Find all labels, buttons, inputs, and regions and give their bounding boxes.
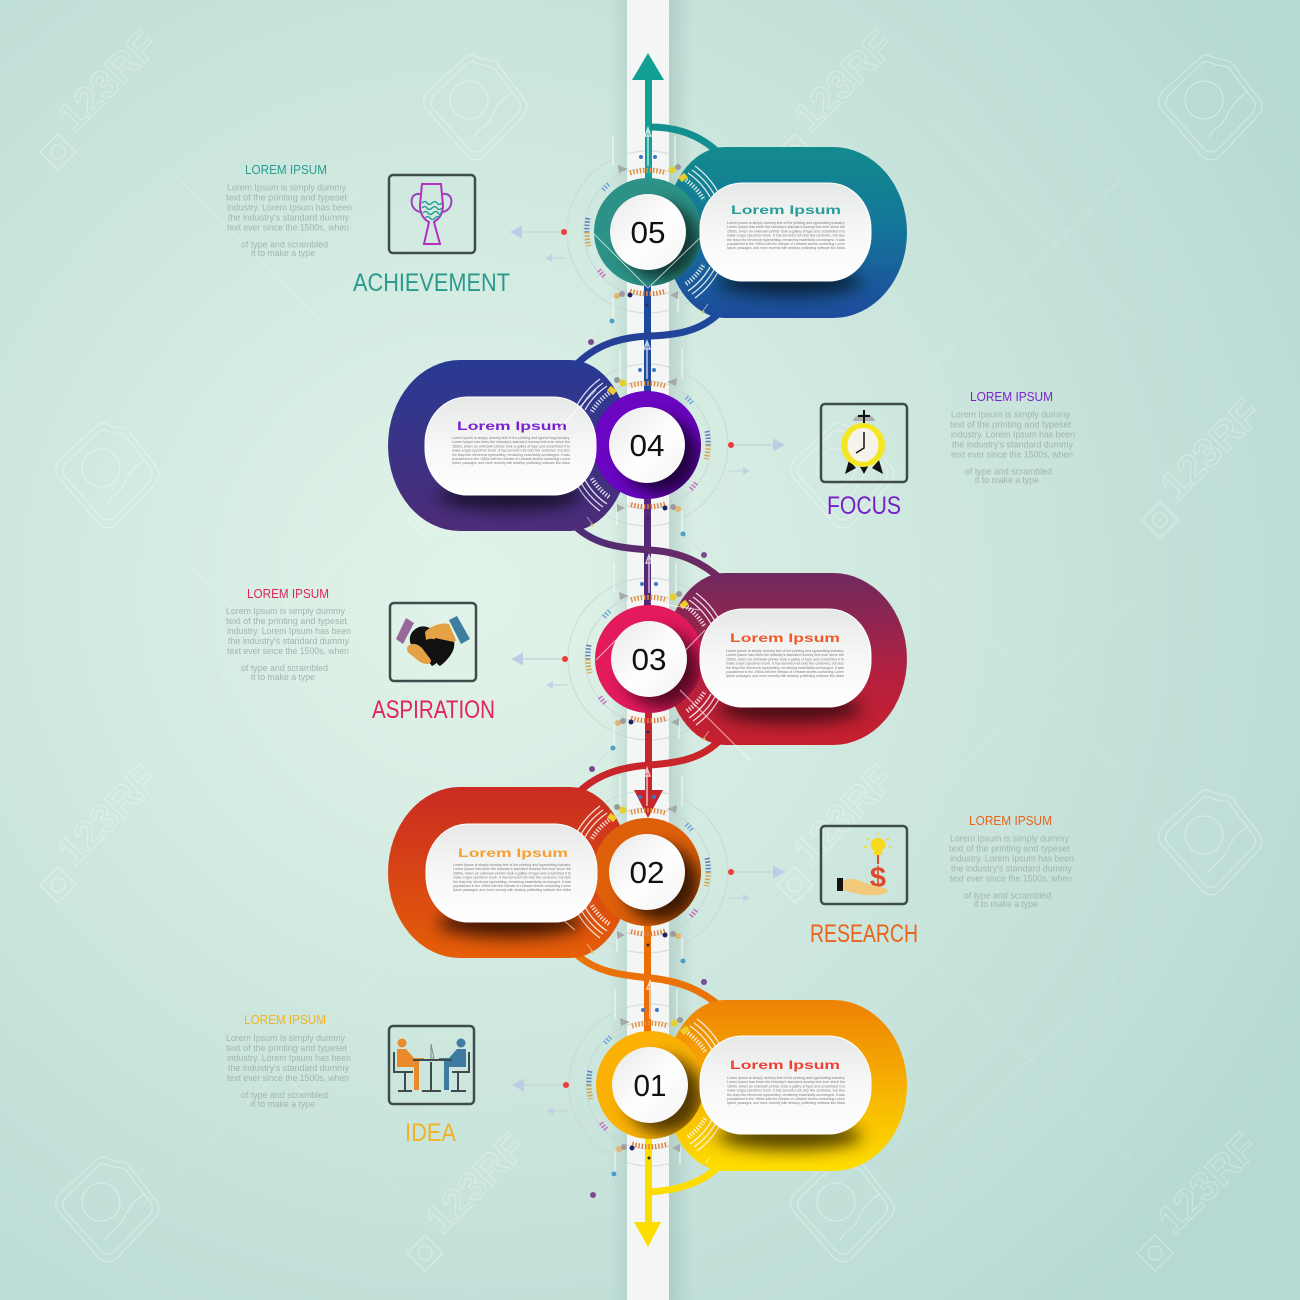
tech rings backdrop xyxy=(510,136,785,1198)
ring 01 xyxy=(596,1031,704,1139)
card 02 xyxy=(426,824,597,922)
panel: step 05 xyxy=(587,128,907,318)
text block: focus: text of the printing and typeset xyxy=(950,420,1071,430)
card 01: 1500s, when an unknown printer took a galley of type and scrambled it to xyxy=(727,1083,846,1088)
card 01: make a type specimen book. It has survived not only five centuries, but also xyxy=(727,1088,846,1093)
label: idea: IDEA xyxy=(405,1119,456,1147)
card 03: 1500s, when an unknown printer took a galley of type and scrambled it to xyxy=(726,656,845,661)
text block: achievement: it to make a type xyxy=(251,248,315,259)
card 03: Lorem Ipsum xyxy=(730,631,840,645)
watermarks: 123RF xyxy=(49,757,167,874)
card 02: make a type specimen book. It has survived not only five centuries, but also xyxy=(453,875,572,880)
disc 01 xyxy=(612,1047,688,1123)
panel: step 04 xyxy=(388,341,708,531)
card 03: Lorem Ipsum has been the industry's standard dummy text ever since the xyxy=(726,652,845,657)
card 05: make a type specimen book. It has survived not only five centuries, but also xyxy=(727,233,846,238)
text block: idea: it to make a type xyxy=(251,1099,315,1110)
blob 04 xyxy=(388,360,630,531)
connector: 03 to 02 xyxy=(576,738,722,795)
watermarks: 123RF xyxy=(417,391,535,508)
watermarks: 123RF xyxy=(1152,391,1270,508)
card shadow 04 xyxy=(438,482,582,510)
spine: 03 to 02 with down arrow xyxy=(634,710,663,818)
card 01: Ipsum passages, and more recently with desktop publishing software like Aldus xyxy=(727,1100,845,1105)
card 04: Lorem Ipsum xyxy=(457,419,567,433)
panel: step 03 xyxy=(588,555,907,745)
ring 04 xyxy=(593,391,701,499)
text block: research: it to make a type xyxy=(974,899,1038,910)
card 03: popularised in the 1960s with the release of Letraset sheets containing Lorem xyxy=(726,669,845,674)
card 05: 1500s, when an unknown printer took a galley of type and scrambled it to xyxy=(727,228,846,233)
text block: achievement: text of the printing and typeset xyxy=(226,192,347,204)
card 04: 1500s, when an unknown printer took a galley of type and scrambled it to xyxy=(452,443,571,448)
text block: aspiration: text of the printing and typeset xyxy=(226,616,347,627)
text block: aspiration xyxy=(226,586,351,683)
text block: idea xyxy=(226,1012,351,1110)
card 02: Lorem Ipsum xyxy=(458,846,568,860)
blob 03 xyxy=(665,573,907,745)
text block: idea: industry. Lorem Ipsum has been xyxy=(227,1053,351,1064)
watermarks: 123RF xyxy=(1149,1125,1267,1242)
icon: bulb and money xyxy=(821,826,907,904)
card 02: 1500s, when an unknown printer took a galley of type and scrambled it to xyxy=(453,870,572,875)
text block: focus: LOREM IPSUM xyxy=(970,389,1053,404)
ring 03 xyxy=(595,605,703,713)
text block: aspiration: industry. Lorem Ipsum has been xyxy=(227,626,351,637)
panel: step 01 xyxy=(589,981,907,1171)
label: research: RESEARCH xyxy=(810,920,918,948)
card 01: Lorem Ipsum is simply dummy text of the printing and typesetting industry. xyxy=(727,1075,845,1080)
text block: achievement: the industry's standard dummy xyxy=(228,212,349,224)
blob 02 xyxy=(388,787,630,958)
watermarks: 123RF xyxy=(49,23,167,140)
text block: research: text of the printing and typeset xyxy=(949,844,1070,854)
text block: idea: of type and scrambled xyxy=(241,1090,328,1101)
number 02: 02 xyxy=(630,855,664,890)
text block: aspiration: text ever since the 1500s, when xyxy=(227,646,349,657)
card 02: Ipsum passages, and more recently with desktop publishing software like Aldus xyxy=(453,887,571,892)
text block: achievement: industry. Lorem Ipsum has been xyxy=(227,202,352,214)
number 05: 05 xyxy=(630,215,666,250)
card shadow 02 xyxy=(438,909,582,937)
card 02: Lorem Ipsum is simply dummy text of the printing and typesetting industry. xyxy=(453,862,571,867)
card 03: Lorem Ipsum is simply dummy text of the printing and typesetting industry. xyxy=(726,648,844,653)
text block: research: LOREM IPSUM xyxy=(969,813,1052,828)
card shadow 03 xyxy=(718,695,862,723)
text block: aspiration: LOREM IPSUM xyxy=(247,586,329,601)
text block: research: industry. Lorem Ipsum has been xyxy=(950,854,1074,864)
number 03: 03 xyxy=(632,642,666,677)
number 01: 01 xyxy=(634,1068,666,1103)
card 04: Lorem Ipsum has been the industry's standard dummy text ever since the xyxy=(452,439,571,444)
text block: aspiration: Lorem Ipsum is simply dummy xyxy=(226,606,345,617)
icon: two people at a table xyxy=(389,1026,474,1104)
text block: focus: Lorem Ipsum is simply dummy xyxy=(951,410,1070,420)
text block: idea: the industry's standard dummy xyxy=(228,1063,349,1074)
card 03 xyxy=(700,609,871,707)
icon: bulb and money: $ xyxy=(870,862,886,894)
text block: achievement: Lorem Ipsum is simply dummy xyxy=(227,182,346,194)
ring 02 xyxy=(593,818,701,926)
text block: research: the industry's standard dummy xyxy=(951,864,1072,874)
card 02: popularised in the 1960s with the release of Letraset sheets containing Lorem xyxy=(453,883,572,888)
connector: 02 to 01 xyxy=(575,953,722,1008)
watermarks: 123RF xyxy=(785,23,903,140)
disc 05 xyxy=(610,194,686,270)
text block: research: Lorem Ipsum is simply dummy xyxy=(950,834,1069,844)
card 01: popularised in the 1960s with the release of Letraset sheets containing Lorem xyxy=(727,1096,846,1101)
blob 05 xyxy=(665,147,907,318)
text block: achievement: LOREM IPSUM xyxy=(245,162,327,177)
disc 04 xyxy=(609,407,685,483)
arrow: top teal spine xyxy=(632,53,664,183)
card 01: the leap into electronic typesetting, remaining essentially unchanged. It was xyxy=(727,1092,845,1097)
connector: 05 to 04 xyxy=(575,310,722,366)
card 02: Lorem Ipsum has been the industry's standard dummy text ever since the xyxy=(453,866,572,871)
connector: blob 01 to bottom xyxy=(650,1163,722,1192)
card 05: Ipsum passages, and more recently with desktop publishing software like Aldus xyxy=(727,245,845,250)
connector: top to blob 05 xyxy=(650,127,722,156)
text block: research: of type and scrambled xyxy=(964,890,1051,902)
text block: idea: Lorem Ipsum is simply dummy xyxy=(226,1033,345,1044)
blob 01 xyxy=(665,1000,907,1171)
icon: trophy xyxy=(389,175,475,253)
text block: idea: text of the printing and typeset xyxy=(226,1043,347,1054)
text block: achievement xyxy=(226,162,352,259)
text block: focus: industry. Lorem Ipsum has been xyxy=(951,430,1075,440)
arrow: bottom yellow spine xyxy=(634,1135,661,1247)
watermarks: 123RF xyxy=(785,757,903,874)
card 05: Lorem Ipsum xyxy=(731,203,841,217)
ring 05 xyxy=(594,178,702,286)
number 04: 04 xyxy=(630,428,664,463)
card 01 xyxy=(700,1036,871,1134)
card 05: the leap into electronic typesetting, remaining essentially unchanged. It was xyxy=(727,237,845,242)
card 04: the leap into electronic typesetting, remaining essentially unchanged. It was xyxy=(452,452,570,457)
text block: aspiration: of type and scrambled xyxy=(241,663,328,674)
card 04: Lorem Ipsum is simply dummy text of the printing and typesetting industry. xyxy=(452,435,570,440)
text block: focus: it to make a type xyxy=(975,475,1039,486)
icon: alarm clock xyxy=(821,404,907,482)
spine: 04 to 03 xyxy=(644,497,651,607)
label: aspiration: ASPIRATION xyxy=(372,696,495,724)
text block: focus: text ever since the 1500s, when xyxy=(951,450,1073,460)
central white strip xyxy=(609,0,693,1300)
panel: step 02 xyxy=(388,768,708,958)
card shadow 05 xyxy=(718,268,862,296)
text block: focus: the industry's standard dummy xyxy=(952,440,1073,450)
icon: handshake xyxy=(390,603,476,681)
card 01: Lorem Ipsum xyxy=(730,1058,840,1072)
watermarks: 123RF xyxy=(417,1125,535,1242)
text block: research: text ever since the 1500s, when xyxy=(950,874,1072,884)
label: focus: FOCUS xyxy=(827,492,901,520)
disc 02 xyxy=(609,834,685,910)
label: achievement: ACHIEVEMENT xyxy=(353,269,510,297)
text block: aspiration: it to make a type xyxy=(251,672,315,683)
card shadow 01 xyxy=(718,1122,862,1150)
text block: research xyxy=(949,813,1074,910)
card 02: the leap into electronic typesetting, remaining essentially unchanged. It was xyxy=(453,879,571,884)
card 04: Ipsum passages, and more recently with desktop publishing software like Aldus xyxy=(452,460,570,465)
decorative faint diagonals xyxy=(170,120,1130,1190)
card 05: popularised in the 1960s with the release of Letraset sheets containing Lorem xyxy=(727,241,846,246)
card 01: Lorem Ipsum has been the industry's standard dummy text ever since the xyxy=(727,1079,846,1084)
card 03: make a type specimen book. It has survived not only five centuries, but also xyxy=(726,661,845,666)
card 03: Ipsum passages, and more recently with desktop publishing software like Aldus xyxy=(726,673,844,678)
spine: 05 to 04 xyxy=(644,284,651,396)
text block: focus xyxy=(950,389,1075,486)
text block: idea: text ever since the 1500s, when xyxy=(227,1073,349,1084)
spine: 02 to 01 xyxy=(644,922,651,1037)
card 03: the leap into electronic typesetting, remaining essentially unchanged. It was xyxy=(726,665,844,670)
disc 03 xyxy=(611,621,687,697)
card 05: Lorem Ipsum is simply dummy text of the printing and typesetting industry. xyxy=(727,220,845,225)
text block: focus: of type and scrambled xyxy=(965,466,1052,478)
card 04 xyxy=(425,397,596,495)
card 05 xyxy=(700,183,871,281)
text block: aspiration: the industry's standard dummy xyxy=(228,636,349,647)
text block: achievement: of type and scrambled xyxy=(241,240,328,250)
text block: idea: LOREM IPSUM xyxy=(244,1012,326,1027)
card 04: make a type specimen book. It has survived not only five centuries, but also xyxy=(452,448,571,453)
card 04: popularised in the 1960s with the release of Letraset sheets containing Lorem xyxy=(452,456,571,461)
card 05: Lorem Ipsum has been the industry's standard dummy text ever since the xyxy=(727,224,846,229)
connector: 04 to 03 xyxy=(575,526,722,580)
decorative thin diagonals over rings xyxy=(540,234,750,930)
text block: achievement: text ever since the 1500s, when xyxy=(227,222,349,234)
